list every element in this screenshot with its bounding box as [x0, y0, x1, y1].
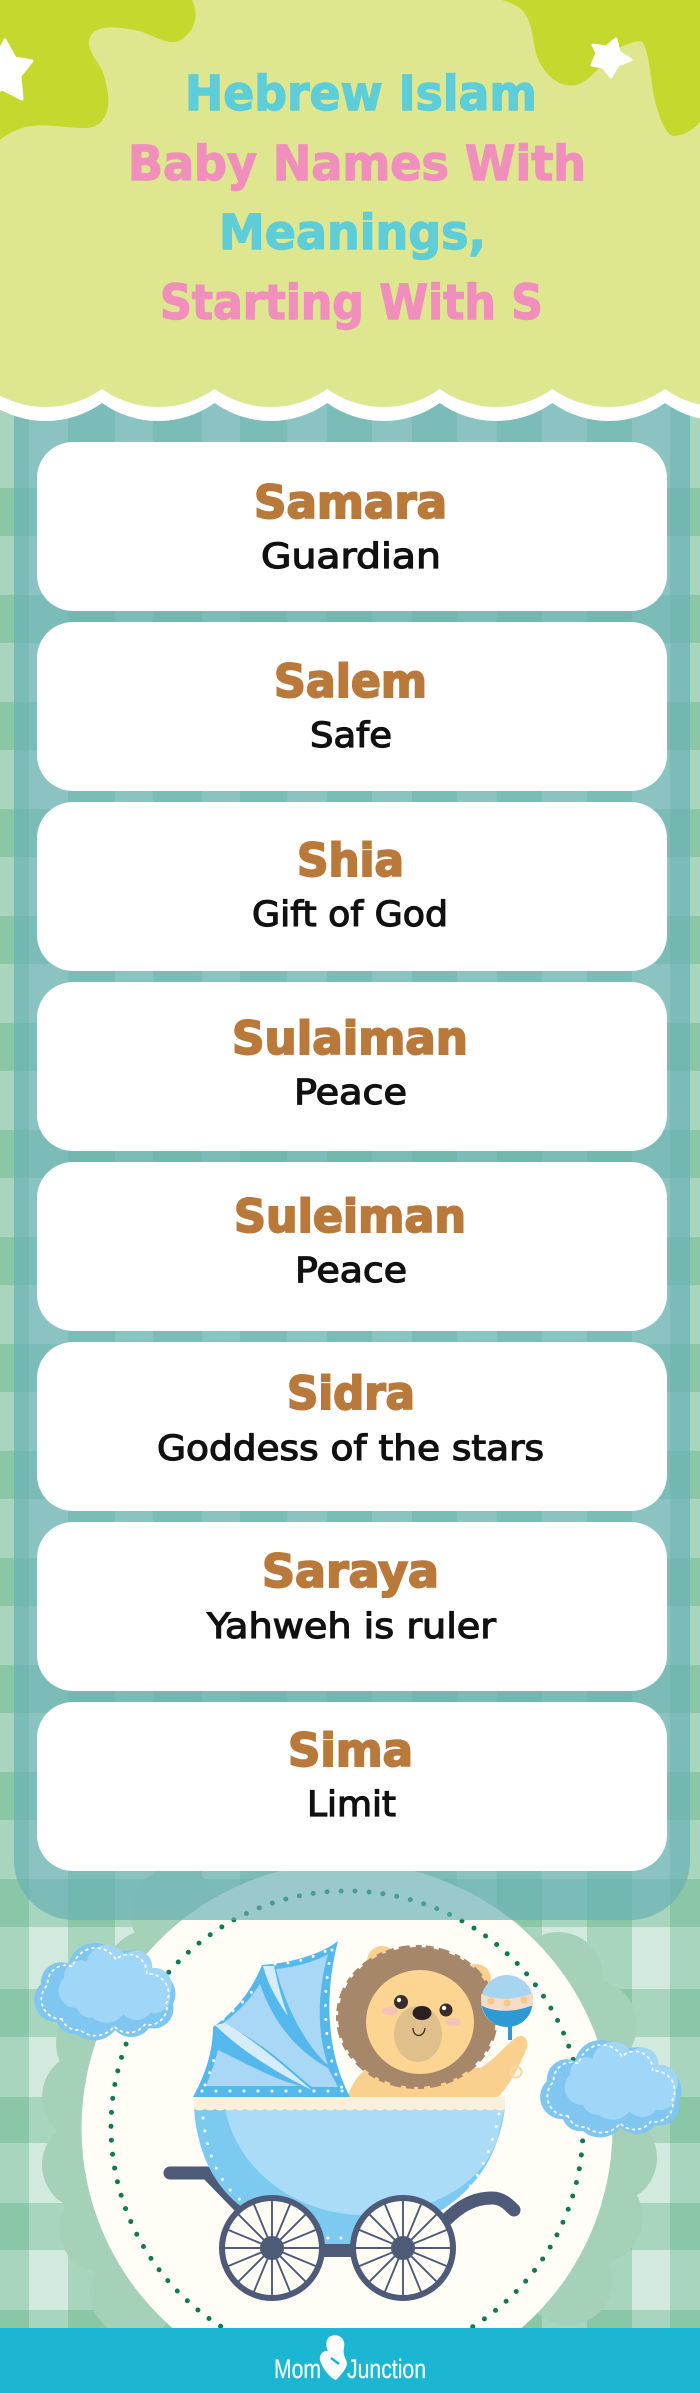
- icon: baby stroller: [170, 1941, 514, 2298]
- basket trim: [194, 2097, 505, 2110]
- card: Sima: Sima: [288, 1724, 413, 1777]
- card: Shia: Gift of God: [252, 895, 448, 935]
- card: Samara: [37, 442, 667, 611]
- logo icon: mother and child: [320, 2335, 347, 2380]
- title: [128, 66, 586, 331]
- footer bar: [0, 2328, 700, 2393]
- white circle backdrop: [82, 1862, 612, 2393]
- card: Saraya: Yahweh is ruler: [206, 1607, 497, 1647]
- translucent teal panel behind the cards: [14, 340, 690, 1920]
- rattle: [481, 1975, 533, 2078]
- stroller basket: [194, 2097, 505, 2246]
- lion mane: [338, 1947, 496, 2087]
- title: Baby Names With: [128, 136, 586, 192]
- title: Meanings,: [219, 205, 486, 261]
- logo wordmark: [274, 2354, 426, 2384]
- card: Suleiman: Peace: [295, 1251, 407, 1291]
- white scallop edge: [0, 0, 700, 421]
- lion ears: [367, 1946, 491, 1994]
- card: Sulaiman: [37, 982, 667, 1151]
- light green banner: [0, 0, 700, 407]
- card: Samara: Samara: [254, 476, 447, 529]
- card: Shia: [37, 802, 667, 971]
- icon: right cloud: [540, 2040, 681, 2137]
- dotted green ring: [111, 1891, 583, 2363]
- lime corner left: [0, 0, 196, 140]
- lion cheeks: [382, 2007, 461, 2026]
- lion body and arm: [347, 2036, 527, 2097]
- logo wordmark: Junction: [347, 2354, 426, 2384]
- card: Suleiman: [37, 1162, 667, 1331]
- card: Salem: Salem: [274, 655, 427, 708]
- card: Sima: Limit: [307, 1785, 396, 1825]
- card: Salem: Safe: [310, 716, 392, 756]
- card: Salem: [37, 622, 667, 791]
- card: Sima: [37, 1702, 667, 1871]
- stroller left handle: [170, 2173, 243, 2210]
- icon: lion cub with rattle: [338, 1946, 533, 2097]
- card: Suleiman: Suleiman: [234, 1190, 466, 1243]
- card: Sulaiman: Peace: [294, 1073, 407, 1113]
- title: Hebrew Islam: [185, 66, 537, 122]
- scalloped green blob behind the circle: [42, 1865, 657, 2375]
- card: Saraya: [37, 1522, 667, 1691]
- stroller right handle: [446, 2198, 514, 2220]
- stroller hood: [193, 1941, 350, 2097]
- card: Saraya: Saraya: [262, 1545, 439, 1598]
- star left: [0, 40, 32, 99]
- title: Starting With S: [160, 275, 543, 331]
- header: scalloped title banner: [0, 0, 700, 421]
- logo wordmark: Mom: [274, 2354, 321, 2384]
- lion face: [366, 1970, 474, 2074]
- lion mouth: [413, 2028, 425, 2036]
- card: Shia: Shia: [297, 834, 404, 887]
- card: Sulaiman: Sulaiman: [232, 1012, 468, 1065]
- lime corner right: [502, 0, 700, 136]
- stroller right wheel: [353, 2198, 453, 2298]
- star right: [592, 39, 631, 77]
- stroller axle: [272, 2244, 403, 2257]
- card: Sidra: [37, 1342, 667, 1511]
- stroller left wheel: [222, 2198, 322, 2298]
- lion eyes: [394, 1995, 452, 2016]
- card: Samara: Guardian: [261, 537, 441, 577]
- card: Sidra: Goddess of the stars: [157, 1429, 544, 1469]
- card: Sidra: Sidra: [287, 1367, 415, 1420]
- lion nose: [412, 2006, 432, 2020]
- lion muzzle: [394, 2006, 442, 2062]
- icon: left cloud: [34, 1943, 175, 2040]
